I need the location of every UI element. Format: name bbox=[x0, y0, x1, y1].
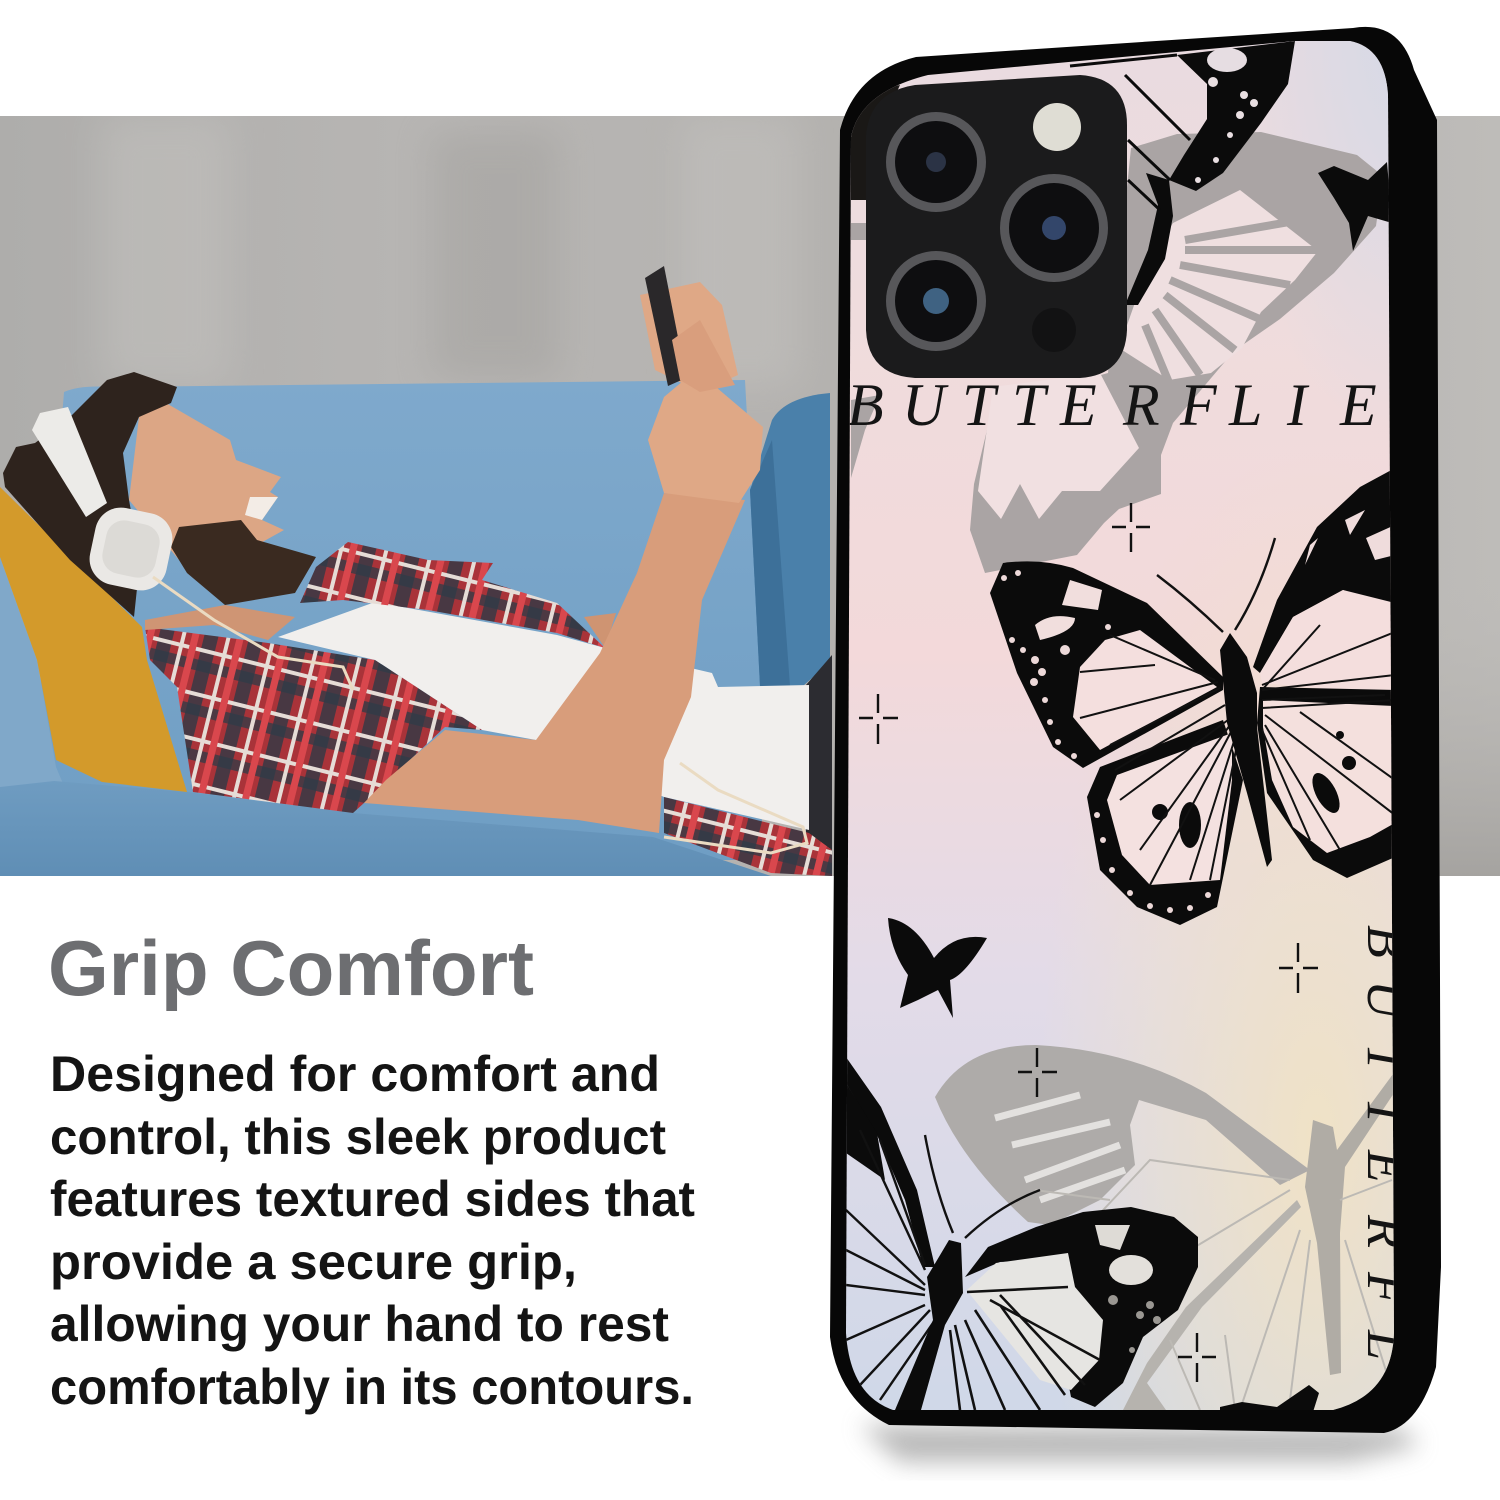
concrete wall bbox=[0, 116, 1500, 876]
sparkles bbox=[859, 503, 1318, 1382]
case body bbox=[830, 27, 1441, 1433]
lens bottom left bbox=[886, 251, 986, 351]
body bbox=[1220, 633, 1272, 867]
flash bbox=[1033, 103, 1081, 151]
ghost butterfly top bbox=[851, 132, 1383, 573]
small butterfly bottom bbox=[1220, 1385, 1319, 1412]
phone drop shadow bbox=[860, 1425, 1420, 1462]
plaid shirt bbox=[145, 542, 832, 876]
body text: control, this sleek product bbox=[50, 1109, 666, 1165]
ghost butterfly bottom bbox=[935, 1045, 1396, 1410]
body bbox=[895, 1240, 963, 1410]
body text: provide a secure grip, bbox=[50, 1234, 577, 1290]
forewing left bbox=[990, 561, 1223, 768]
veins bbox=[1080, 625, 1395, 885]
lens right bbox=[1000, 174, 1108, 282]
hindwing right bbox=[1257, 687, 1395, 878]
left wing bbox=[846, 1057, 935, 1267]
heading: Grip Comfort bbox=[48, 924, 534, 1012]
body text: features textured sides that bbox=[50, 1171, 695, 1227]
white t-shirt bbox=[278, 602, 809, 830]
top partial butterfly bbox=[851, 41, 1295, 305]
microphone sensor bbox=[1032, 308, 1076, 352]
sofa bbox=[0, 380, 830, 876]
camera module bbox=[866, 75, 1127, 378]
bottom left butterfly bbox=[846, 1057, 1198, 1410]
body text bbox=[50, 1046, 695, 1415]
white headphones bbox=[32, 407, 807, 853]
main butterfly bbox=[990, 468, 1395, 925]
small butterfly center bbox=[888, 918, 987, 1018]
body text: Designed for comfort and bbox=[50, 1046, 660, 1102]
body text: allowing your hand to rest bbox=[50, 1296, 669, 1352]
arm and hands bbox=[364, 266, 763, 833]
trousers bbox=[806, 655, 832, 850]
phone case bbox=[830, 27, 1441, 1433]
case screen artwork bbox=[840, 30, 1416, 1420]
head and face bbox=[3, 372, 316, 640]
forewing right bbox=[1253, 468, 1395, 673]
right wing bbox=[965, 1207, 1198, 1407]
yellow pillow bbox=[0, 487, 187, 792]
lens top left bbox=[886, 112, 986, 212]
small butterfly top right bbox=[1318, 162, 1392, 251]
BUTTERFLIES horizontal text: BUTTERFLIE bbox=[847, 372, 1377, 438]
background photo: man relaxing on sofa bbox=[0, 116, 1500, 876]
antennae bbox=[1157, 538, 1275, 632]
hindwing left bbox=[1087, 720, 1243, 925]
BUTTERFLIES vertical text: BUTTERFL bbox=[1356, 925, 1416, 1360]
body text: comfortably in its contours. bbox=[50, 1359, 694, 1415]
